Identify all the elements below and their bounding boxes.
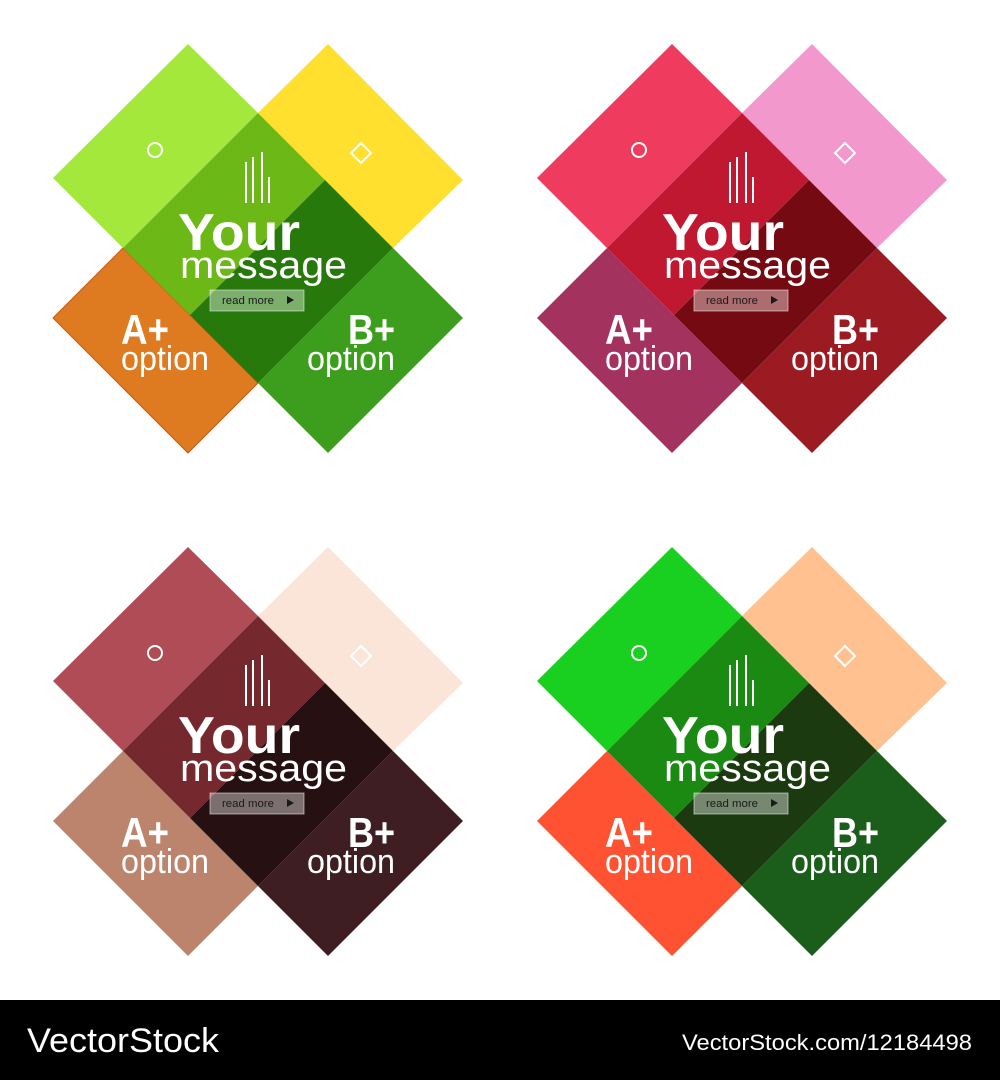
panel: green-orange cluster	[537, 547, 947, 956]
panel: green-yellow cluster	[53, 44, 463, 453]
footer bar: VectorStock	[27, 1022, 220, 1060]
panel: red-pink cluster	[537, 44, 947, 453]
footer bar	[0, 1000, 1000, 1080]
panel: brown-peach cluster	[53, 547, 463, 956]
footer bar: VectorStock.com/12184498	[682, 1030, 972, 1055]
